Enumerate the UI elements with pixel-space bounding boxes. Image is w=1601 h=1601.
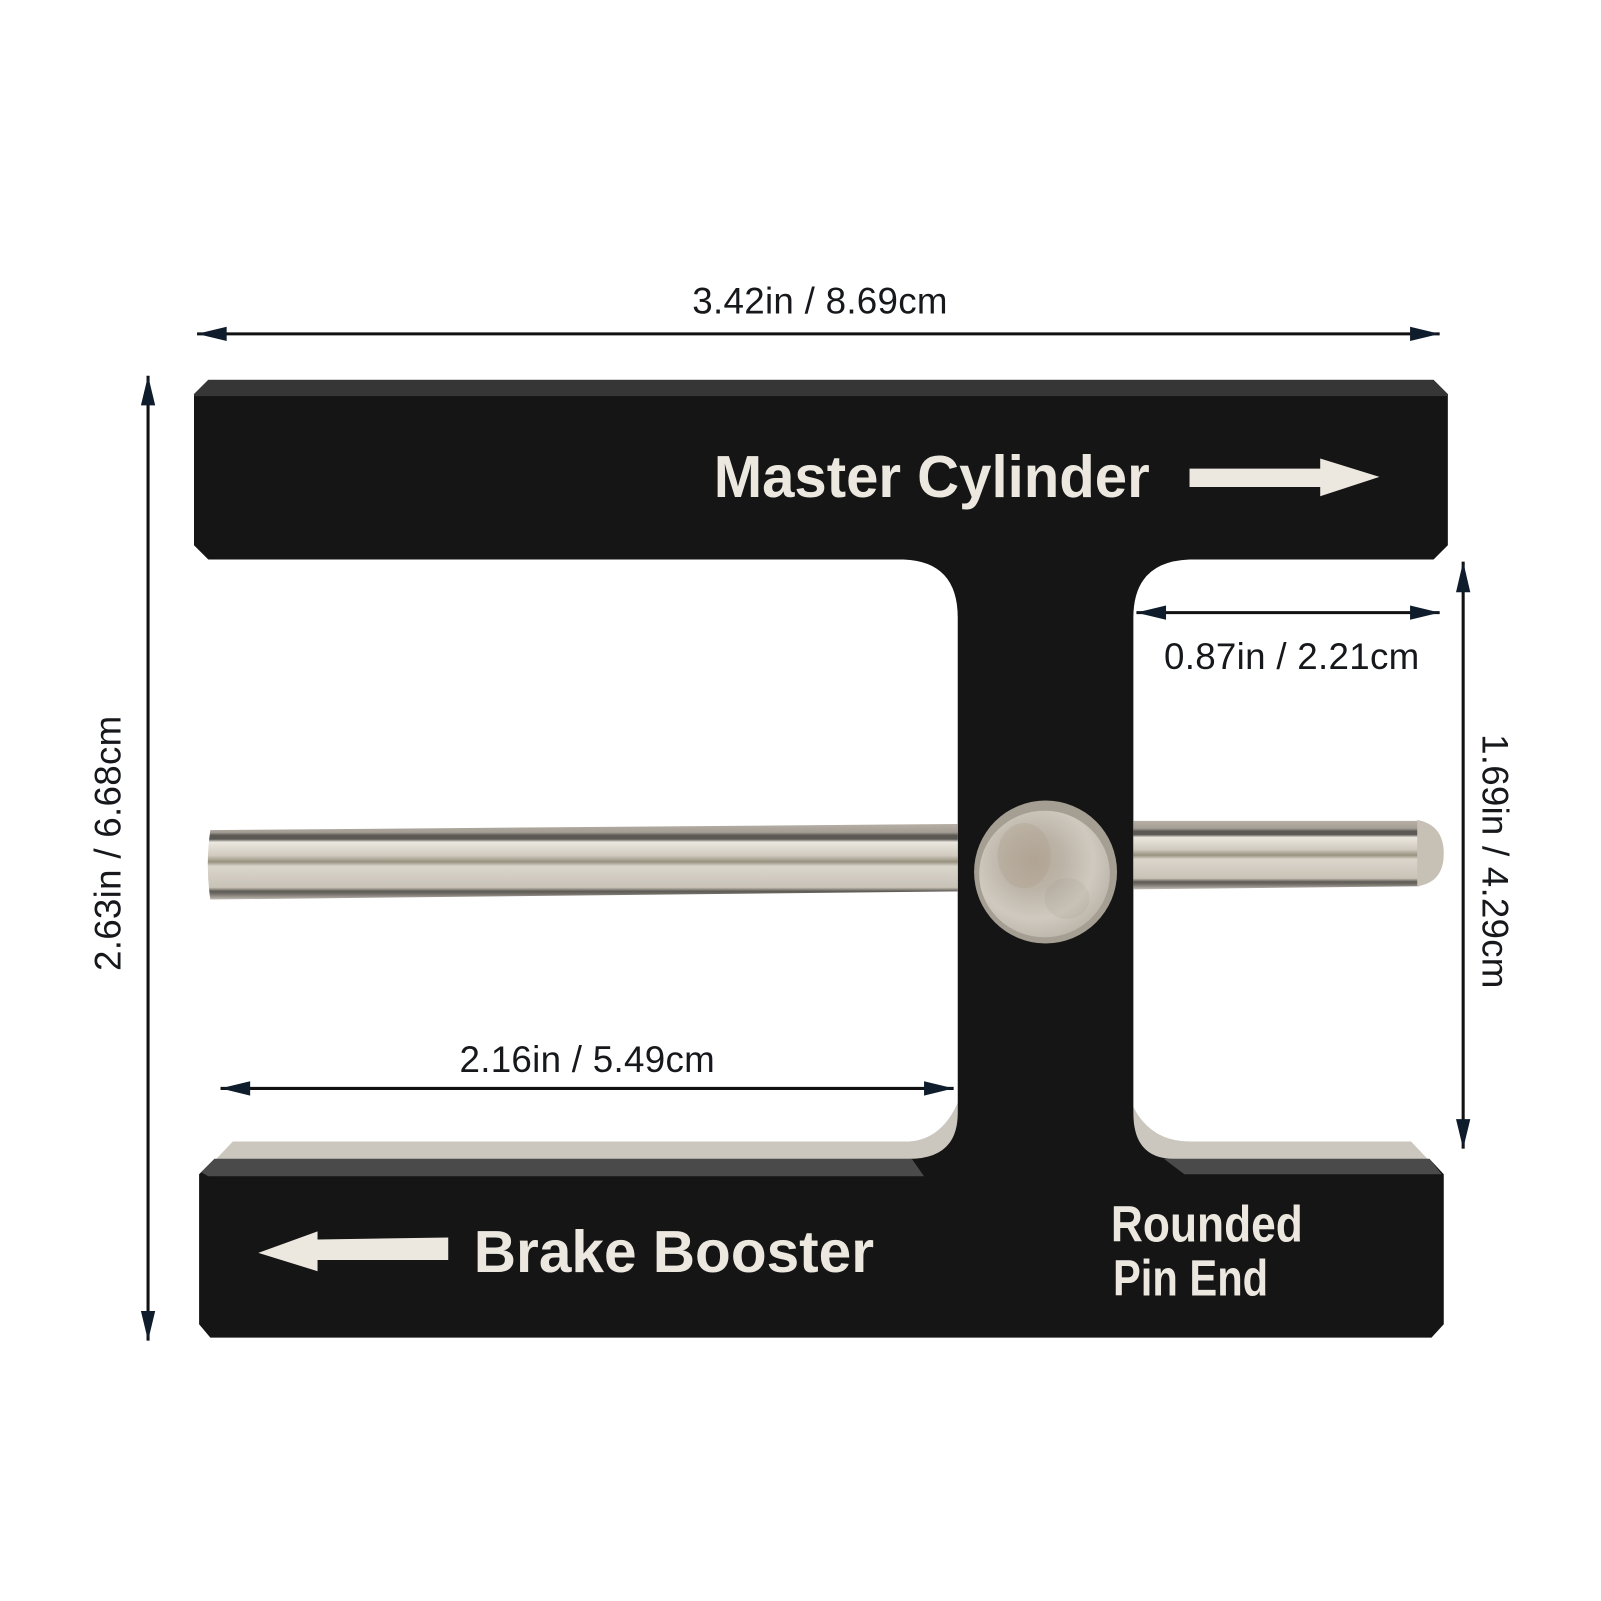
dimension: arm gap height: 1.69in / 4.29cm xyxy=(1475,734,1516,988)
label: Brake Booster: Brake Booster xyxy=(474,1218,874,1285)
label: Master Cylinder: Master Cylinder xyxy=(714,443,1150,510)
gauge body xyxy=(194,380,1448,1338)
locking pin right segment xyxy=(1133,821,1419,889)
dimension: overall height: 2.63in / 6.68cm xyxy=(87,716,128,971)
pin knob xyxy=(974,800,1117,943)
dimension: pin span xyxy=(221,1039,954,1096)
top bevel xyxy=(194,380,1448,396)
label: Rounded: Rounded xyxy=(1111,1196,1303,1253)
metal sidewall highlight xyxy=(214,1103,1429,1161)
dimension: arm length xyxy=(1136,605,1440,677)
dimension: overall width: 3.42in / 8.69cm xyxy=(692,280,948,321)
locking pin left segment xyxy=(208,824,958,900)
arrow: toward brake booster xyxy=(258,1231,448,1271)
dimension: pin span: 2.16in / 5.49cm xyxy=(459,1039,715,1080)
dimension: arm length: 0.87in / 2.21cm xyxy=(1164,636,1419,677)
bottom bevels xyxy=(201,1159,1442,1176)
arrow: toward master cylinder xyxy=(1190,458,1379,496)
dimension: overall height xyxy=(87,376,155,1341)
label: Pin End: Pin End xyxy=(1113,1250,1268,1307)
dimension: overall width xyxy=(197,280,1440,341)
product: brake pushrod gauge xyxy=(194,380,1448,1338)
pin tip dome xyxy=(1417,820,1444,886)
dimension: arm gap height xyxy=(1456,562,1516,1149)
